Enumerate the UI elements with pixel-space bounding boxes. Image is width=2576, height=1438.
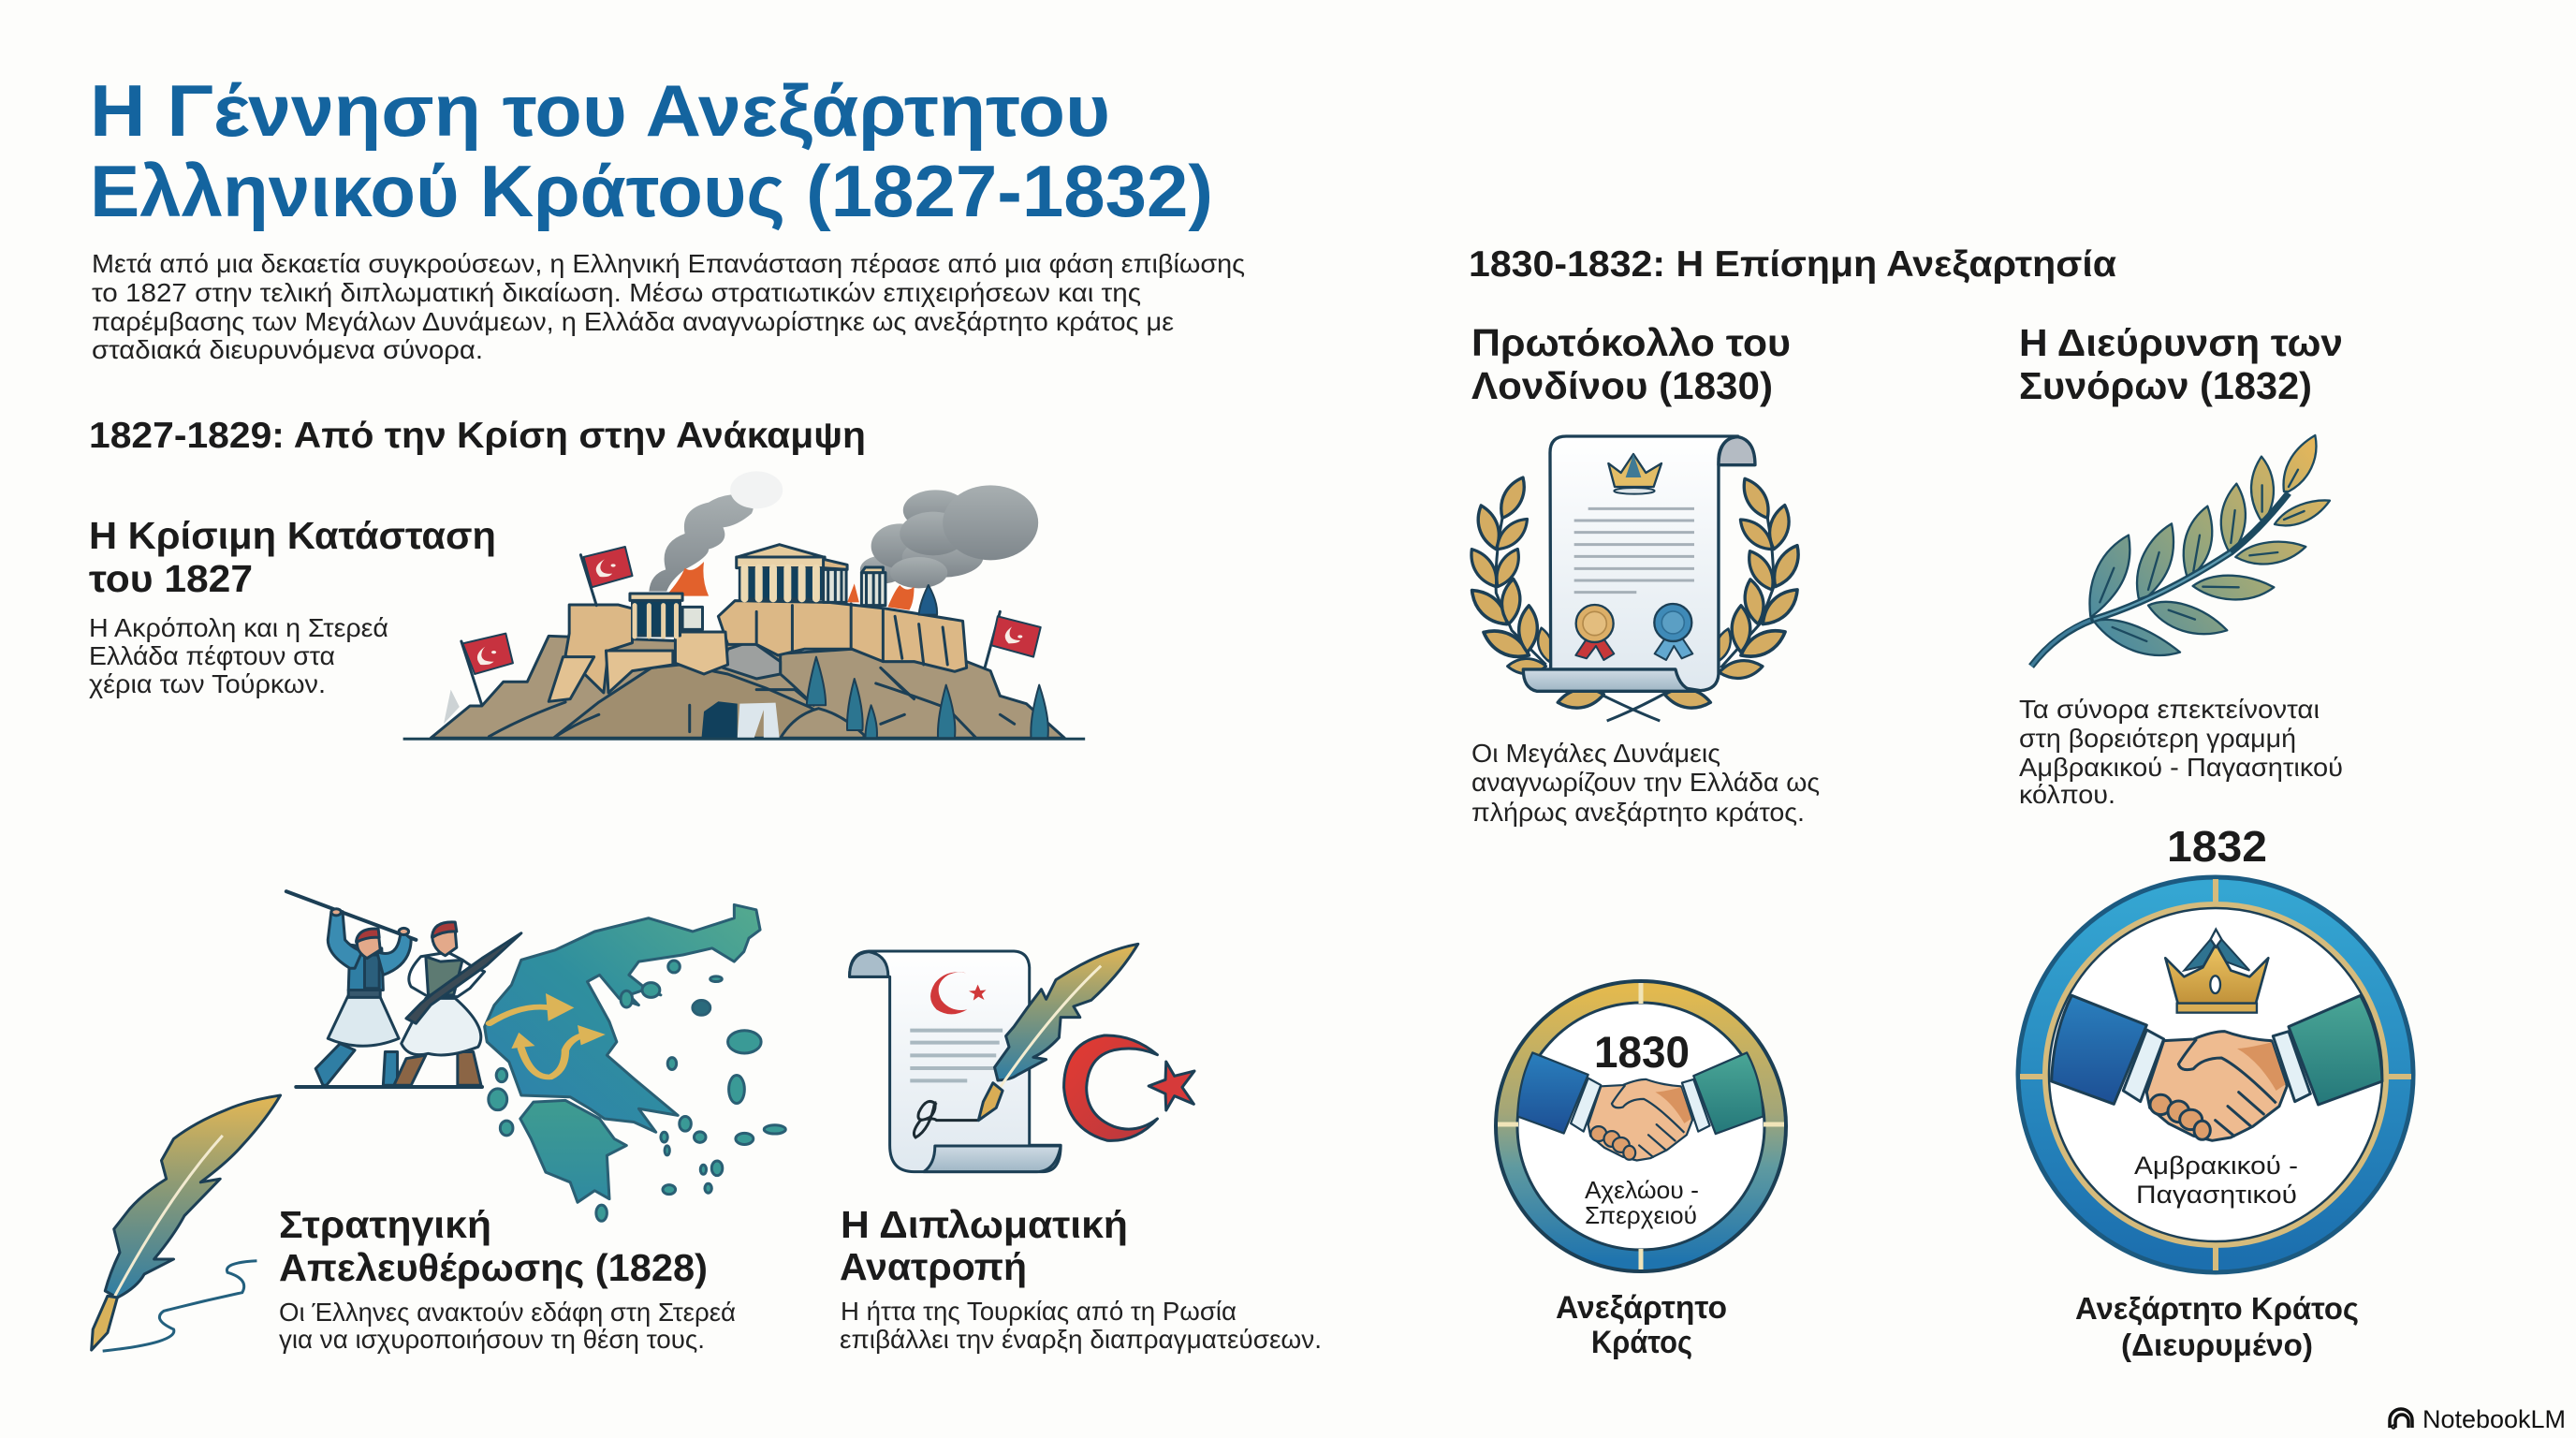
badge: 1830 independent state <box>1496 981 1786 1271</box>
laurel wreath <box>1465 474 1806 721</box>
intro paragraph: παρέμβασης των Μεγάλων Δυνάμεων, η Ελλάδα αναγνωρίστηκε ως ανεξάρτητο κράτος με <box>92 307 1174 336</box>
document lines <box>1574 508 1694 593</box>
block: critical situation 1827 <box>89 514 496 698</box>
badge: 1830 independent state: Σπερχειού <box>1585 1201 1697 1229</box>
text: border expansion description: Τα σύνορα επεκτείνονται <box>2019 695 2320 724</box>
cypresses <box>807 585 1048 738</box>
block: diplomatic reversal: επιβάλλει την έναρξη διαπραγματεύσεων. <box>840 1325 1322 1354</box>
label: independent state 1830 <box>1556 1290 1727 1360</box>
heading: London Protocol 1830 <box>1471 321 1791 407</box>
cave <box>701 701 738 738</box>
text: London Protocol description: Οι Μεγάλες Δυνάμεις <box>1471 739 1720 768</box>
badge: 1830 independent state: 1830 <box>1594 1027 1690 1077</box>
block: strategic liberation 1828: για να ισχυροποιήσουν τη θέση τους. <box>279 1325 705 1354</box>
block: critical situation 1827: χέρια των Τούρκων. <box>89 669 326 698</box>
right fighter <box>394 1055 426 1085</box>
illustration: Greek fighters <box>286 891 521 1087</box>
seals <box>1575 637 1614 660</box>
icon: olive branch <box>2031 435 2330 667</box>
text: London Protocol description: πλήρως ανεξάρτητο κράτος. <box>1471 798 1805 827</box>
heading: border expansion 1832: Η Διεύρυνση των <box>2019 321 2343 364</box>
block: diplomatic reversal: Η Διπλωματική <box>841 1203 1128 1246</box>
block: strategic liberation 1828: Απελευθέρωσης (1828) <box>279 1246 708 1289</box>
label: independent state expanded: Ανεξάρτητο Κράτος <box>2075 1291 2359 1326</box>
text: border expansion description: Αμβρακικού - Παγασητικού <box>2019 753 2343 782</box>
text: border expansion description <box>2019 695 2343 809</box>
intro paragraph: Μετά από μια δεκαετία συγκρούσεων, η Ελληνική Επανάσταση πέρασε από μια φάση επιβίωσης <box>92 249 1245 278</box>
title: Η Γέννηση του Ανεξάρτητου <box>90 69 1110 152</box>
badge: 1832 expanded state: Αμβρακικού - <box>2134 1152 2298 1180</box>
text: border expansion description: κόλπου. <box>2019 780 2115 809</box>
label: independent state expanded: (Διευρυμένο) <box>2121 1328 2313 1362</box>
heading: border expansion 1832: Συνόρων (1832) <box>2019 364 2312 407</box>
flags <box>462 547 1041 674</box>
title <box>90 69 1213 232</box>
year label 1832: 1832 <box>2167 822 2267 871</box>
block: critical situation 1827: Ελλάδα πέφτουν στα <box>89 641 335 670</box>
block: critical situation 1827: Η Ακρόπολη και η Στερεά <box>89 613 388 642</box>
title: Ελληνικού Κράτους (1827-1832) <box>90 150 1213 232</box>
text: London Protocol description: αναγνωρίζουν την Ελλάδα ως <box>1471 768 1820 797</box>
badge: 1830 independent state: Αχελώου - <box>1585 1176 1699 1204</box>
label: independent state 1830: Ανεξάρτητο <box>1556 1290 1727 1326</box>
intro paragraph <box>92 249 1245 364</box>
heading: London Protocol 1830: Πρωτόκολλο του <box>1471 321 1791 364</box>
block: diplomatic reversal <box>840 1203 1322 1354</box>
label: independent state expanded <box>2075 1291 2359 1362</box>
badge: 1832 expanded state: Παγασητικού <box>2136 1181 2297 1209</box>
intro paragraph: το 1827 στην τελική διπλωματική δικαίωση. Μέσω στρατιωτικών επιχειρήσεων και της <box>92 278 1141 307</box>
badge: 1832 expanded state <box>2018 877 2413 1272</box>
intro paragraph: σταδιακά διευρυνόμενα σύνορα. <box>92 335 483 364</box>
block: strategic liberation 1828 <box>279 1203 736 1354</box>
watermark: NotebookLM: NotebookLM <box>2422 1405 2566 1433</box>
block: critical situation 1827: του 1827 <box>89 557 253 600</box>
crown <box>2165 930 2268 1013</box>
smoke columns <box>649 485 1038 592</box>
left fighter <box>315 1044 355 1085</box>
crown <box>1608 454 1661 487</box>
heading: 1830-1832: 1830-1832: Η Επίσημη Ανεξαρτησία <box>1469 244 2116 285</box>
block: strategic liberation 1828: Οι Έλληνες ανακτούν εδάφη στη Στερεά <box>279 1298 736 1327</box>
heading: London Protocol 1830: Λονδίνου (1830) <box>1471 364 1773 407</box>
text: London Protocol description <box>1471 739 1820 827</box>
map of Greece with campaign arrows <box>485 904 785 1221</box>
icon: treaty scroll with quill and Turkish crescent <box>850 944 1194 1172</box>
block: diplomatic reversal: Η ήττα της Τουρκίας από τη Ρωσία <box>841 1297 1237 1326</box>
icon: quill pen with ink stroke <box>92 1095 281 1351</box>
heading: 1827-1829: 1827-1829: Από την Κρίση στην Ανάκαμψη <box>89 416 866 456</box>
scroll sheet <box>1523 436 1755 691</box>
illustration: Acropolis under siege <box>403 471 1085 739</box>
heading: border expansion 1832 <box>2019 321 2343 407</box>
block: strategic liberation 1828: Στρατηγική <box>279 1203 491 1246</box>
block: diplomatic reversal: Ανατροπή <box>840 1245 1027 1288</box>
block: critical situation 1827: Η Κρίσιμη Κατάσταση <box>89 514 496 557</box>
text: border expansion description: στη βορειότερη γραμμή <box>2019 724 2296 753</box>
label: independent state 1830: Κράτος <box>1591 1325 1692 1360</box>
icon: protocol document with laurel wreath <box>1465 436 1806 721</box>
